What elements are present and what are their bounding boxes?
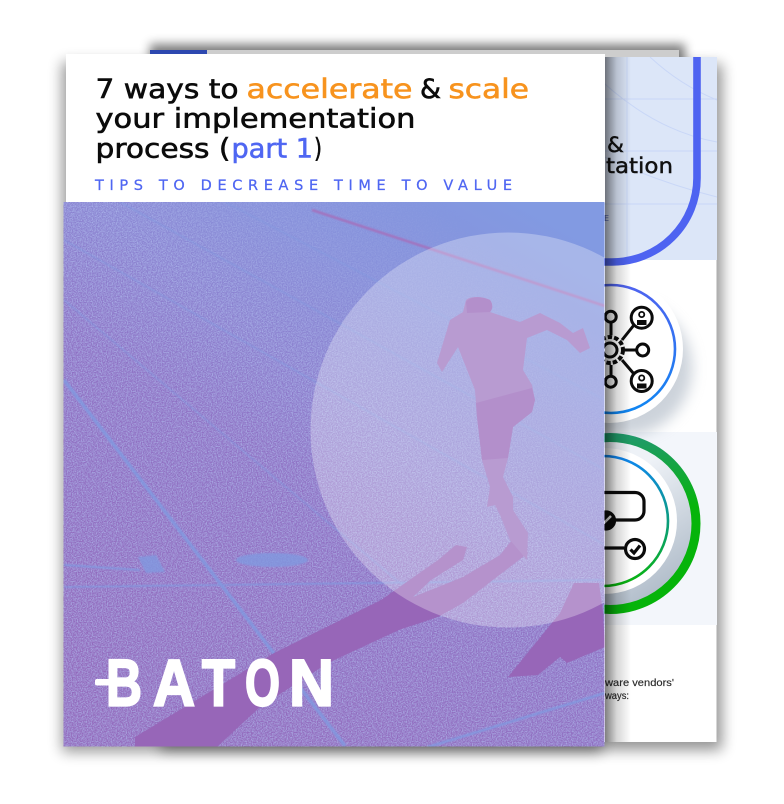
- icon: gear network: [597, 307, 652, 392]
- title: [96, 74, 529, 164]
- runner: [437, 297, 590, 560]
- page shadows: [62, 44, 722, 752]
- runner head: [466, 297, 492, 313]
- infographic: stacked report cover mockup: [53, 37, 732, 762]
- title: process (: [96, 134, 230, 164]
- logo: BATON: O: [245, 646, 280, 720]
- panel: back page: [604, 57, 717, 742]
- subtitle: TIPS TO DECREASE TIME TO VALUE: [94, 178, 512, 194]
- back page subtitle fragment: E: [604, 214, 609, 223]
- blue curved border: [560, 57, 697, 262]
- title: 7 ways to: [96, 74, 238, 105]
- back page heading fragment: &: [607, 133, 624, 157]
- logo: BATON: N: [289, 646, 334, 720]
- logo: BATON: [95, 646, 334, 720]
- logo: BATON: B: [106, 646, 142, 720]
- back page body text fragment: ware vendors': [604, 678, 674, 689]
- back page body text fragment: [604, 678, 674, 702]
- shadow cast by cover: [605, 57, 631, 742]
- runner body: [437, 297, 590, 560]
- title: accelerate: [246, 74, 412, 105]
- back page heading fragment: [606, 133, 673, 178]
- lower tinted panel: [150, 432, 717, 625]
- grain texture: [64, 202, 604, 747]
- cover header: [66, 54, 605, 203]
- back page header panel: [604, 57, 717, 260]
- running track lanes: [64, 202, 605, 747]
- icon: workflow checks: [598, 492, 644, 558]
- icon disc: workflow: [524, 438, 696, 610]
- title: your implementation: [96, 104, 416, 134]
- back page body text fragment: ways:: [604, 691, 629, 702]
- translucent circle: [310, 232, 604, 628]
- runner shadow: [135, 540, 605, 747]
- logo: BATON: T: [202, 646, 235, 720]
- title: &: [420, 74, 441, 105]
- title: ): [314, 134, 322, 164]
- middle page edge: [150, 50, 679, 62]
- cover photo: [64, 202, 604, 746]
- icon disc: integrations hub: [535, 275, 692, 436]
- title: scale: [448, 74, 529, 105]
- runner shorts: [476, 388, 535, 460]
- logo: BATON: A: [153, 646, 195, 720]
- title: part 1: [232, 134, 313, 164]
- track markings: [138, 553, 308, 573]
- back page heading fragment: tation: [606, 154, 673, 178]
- panel: front cover: [64, 54, 605, 746]
- red lane line: [312, 210, 605, 306]
